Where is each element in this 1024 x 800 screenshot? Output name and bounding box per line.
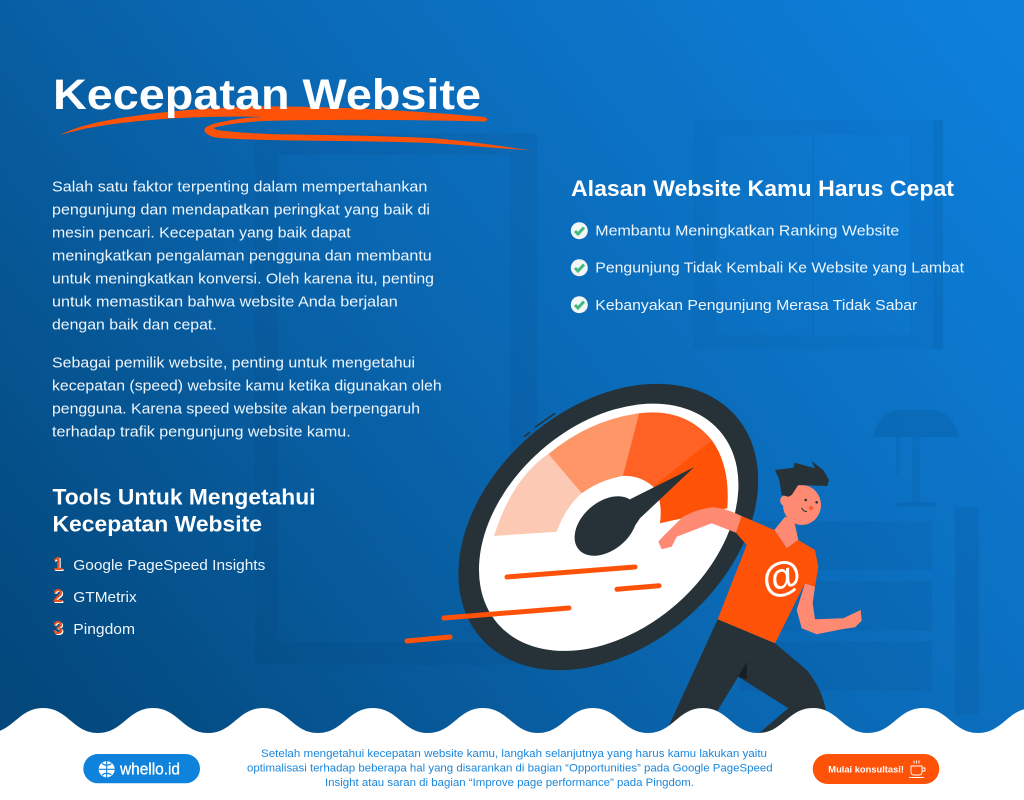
tools heading: Tools Untuk Mengetahui <box>52 484 316 510</box>
t-shirt <box>718 516 818 643</box>
intro paragraph 2: kecepatan (speed) website kamu ketika digunakan oleh <box>52 378 442 394</box>
item 1: 1 <box>54 555 64 575</box>
intro paragraph 1: untuk meningkatkan konversi. Oleh karena itu, penting <box>52 270 434 288</box>
footer text <box>247 748 773 789</box>
background room silhouette <box>255 120 979 715</box>
intro paragraph 1: meningkatkan pengalaman pengguna dan membantu <box>52 248 432 264</box>
item 2: GTMetrix <box>73 589 137 606</box>
consultation button <box>813 754 939 784</box>
head <box>775 461 829 525</box>
gauge needle <box>563 467 694 568</box>
icon: coffee cup <box>909 760 925 778</box>
footer text: Insight atau saran di bagian “Improve page performance” pada Pingdom. <box>325 777 694 789</box>
intro paragraph 1: pengunjung dan mendapatkan peringkat yang baik di <box>52 202 430 218</box>
item 1: 1 <box>53 554 63 574</box>
gauge segment low <box>494 454 582 536</box>
intro paragraph 1: untuk memastikan bahwa website Anda berjalan <box>52 294 398 310</box>
footer text: optimalisasi terhadap beberapa hal yang disarankan di bagian “Opportunities” pada Google PageSpeed <box>247 762 773 774</box>
intro paragraph 2: terhadap trafik pengunjung website kamu. <box>52 424 351 440</box>
gauge segment high <box>623 412 712 487</box>
icon: globe <box>99 761 115 777</box>
tools heading: Kecepatan Website <box>52 512 262 536</box>
item 2 <box>53 586 137 607</box>
title brush underline <box>60 106 532 150</box>
tools list <box>53 554 265 639</box>
intro paragraph 1 <box>52 178 434 334</box>
gauge segment medium <box>548 413 639 493</box>
gauge segment maximum <box>653 440 728 523</box>
item 2: 2 <box>53 586 63 606</box>
intro paragraph 2 <box>52 354 442 440</box>
intro paragraph 1: mesin pencari. Kecepatan yang baik dapat <box>52 224 352 242</box>
left arm <box>658 507 742 549</box>
tools heading <box>52 484 316 536</box>
at symbol on shirt: @ <box>757 551 806 603</box>
trousers <box>660 619 826 745</box>
reasons heading: Alasan Website Kamu Harus Cepat <box>571 176 955 201</box>
website button: whello.id <box>119 760 180 778</box>
title: Kecepatan Website <box>53 72 481 119</box>
intro paragraph 2: pengguna. Karena speed website akan berpengaruh <box>52 400 420 418</box>
speed lines <box>407 567 659 641</box>
gauge body <box>402 326 815 728</box>
white wave footer <box>0 708 1024 800</box>
item 3: 3 <box>54 619 64 639</box>
running person <box>658 461 862 745</box>
item 1: Google PageSpeed Insights <box>73 557 265 574</box>
footer text: Setelah mengetahui kecepatan website kamu, langkah selanjutnya yang harus kamu lakukan yaitu <box>261 748 767 760</box>
reason 3: Kebanyakan Pengunjung Merasa Tidak Sabar <box>595 297 917 314</box>
item 2: 2 <box>54 587 64 607</box>
reason 2: Pengunjung Tidak Kembali Ke Website yang Lambat <box>595 260 965 277</box>
item 3 <box>53 618 135 639</box>
neck <box>774 517 798 548</box>
intro paragraph 1: dengan baik dan cepat. <box>52 316 217 334</box>
reason 1: Membantu Meningkatkan Ranking Website <box>595 223 899 240</box>
website button <box>83 754 200 783</box>
intro paragraph 2: Sebagai pemilik website, penting untuk mengetahui <box>52 354 415 372</box>
item 3: 3 <box>53 618 63 638</box>
item 3: Pingdom <box>73 621 135 638</box>
reasons list <box>571 222 965 314</box>
speedometer illustration <box>402 326 815 728</box>
consultation button: Mulai konsultasi! <box>828 764 904 775</box>
right arm <box>797 583 862 634</box>
motion ticks <box>524 413 555 437</box>
intro paragraph 1: Salah satu faktor terpenting dalam mempertahankan <box>52 178 427 196</box>
